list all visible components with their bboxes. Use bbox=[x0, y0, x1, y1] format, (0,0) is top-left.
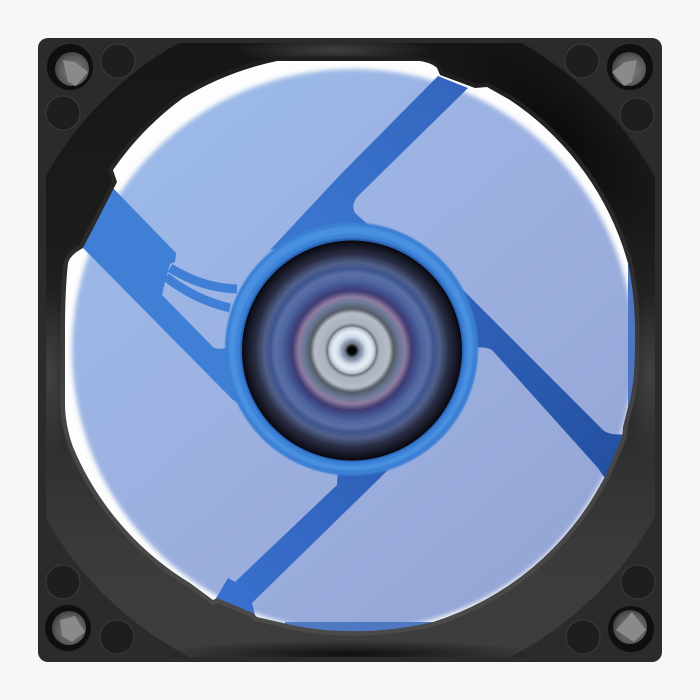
mounting recesses bbox=[46, 44, 655, 654]
screw hole: bottom right bbox=[608, 606, 654, 652]
hub: spinning motor bbox=[242, 240, 462, 460]
opening: white gap behind blades bbox=[50, 45, 650, 645]
strut: left with spokes bbox=[83, 188, 242, 405]
hub: blue ring bbox=[225, 222, 478, 476]
frame: bevel ring bbox=[46, 43, 655, 657]
strut: right bbox=[463, 290, 627, 480]
frame: rim around opening bbox=[65, 61, 635, 631]
blade edge sliver: right bbox=[628, 262, 638, 412]
strut: top right bbox=[270, 76, 468, 250]
screw hole: top right bbox=[607, 44, 653, 90]
illustration: cooling fan front view bbox=[38, 38, 662, 662]
fan blades disc bbox=[72, 69, 638, 634]
screw hole: top left bbox=[47, 44, 93, 90]
strut: bottom bbox=[215, 465, 390, 615]
blade edge sliver: bottom bbox=[285, 622, 435, 634]
screw hole: bottom left bbox=[45, 605, 91, 651]
frame: square black housing bbox=[38, 38, 662, 662]
